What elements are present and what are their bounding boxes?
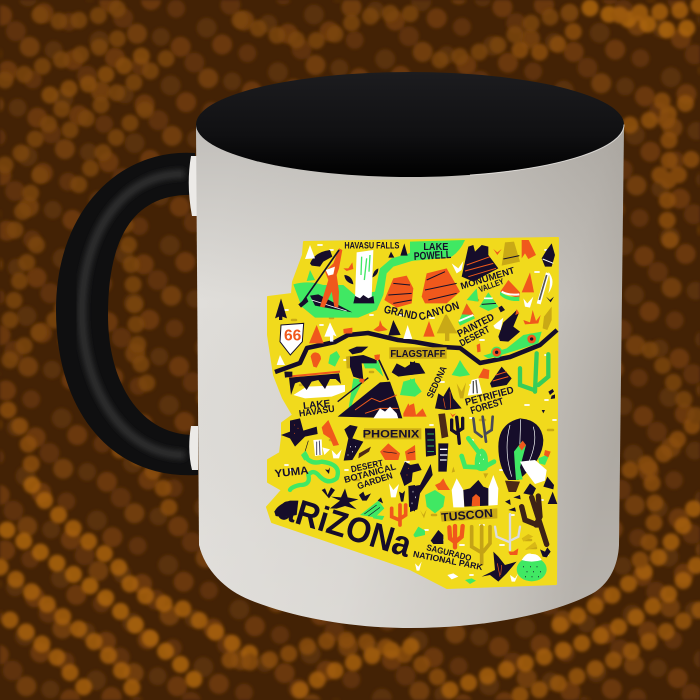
icon: leaves and plants	[343, 262, 388, 334]
icon: green rock	[413, 527, 425, 537]
icon: orange saguaro lower	[449, 526, 463, 547]
label: Grand Canyon	[383, 300, 461, 324]
icon: london bridge	[284, 372, 345, 398]
icon: orange rock left	[410, 403, 427, 417]
label: Petrified Forest: PETRIFIED	[464, 385, 515, 409]
icon: trees and plants	[423, 307, 552, 352]
icon: grey rock	[313, 439, 330, 456]
icon: green plant	[452, 360, 470, 377]
label: Sedona: SEDONA	[425, 364, 449, 400]
icon: black and grey cacti	[450, 413, 493, 443]
label: Flagstaff: FLAGSTAFF	[390, 349, 445, 360]
label: Painted Desert	[456, 312, 497, 349]
icon: paddle boarder	[298, 248, 352, 312]
icon: route 66 sign: 66	[284, 327, 301, 344]
icon: green rock	[400, 378, 415, 397]
icon: striped rock and petrified logs	[468, 367, 512, 396]
label: Desert Botanical Garden: GARDEN	[356, 470, 394, 491]
icon: green barrel cactus bottom	[517, 553, 547, 581]
icon: brown saguaro	[522, 496, 547, 544]
icon: route 66 sign	[280, 323, 304, 355]
icon: small plants	[415, 534, 551, 584]
icon: rocks right side	[505, 477, 557, 512]
icon: green cactus	[462, 438, 494, 471]
icon: small rocks	[431, 530, 443, 544]
map quadrant: southwest	[281, 418, 416, 525]
label: Tuscon: TUSCON	[441, 507, 493, 524]
icon: saguaro cactus green	[520, 353, 548, 392]
icon: sedona black rocks	[435, 387, 462, 410]
icon: big prickly pear	[400, 462, 415, 512]
lake and river: green water	[293, 252, 415, 318]
mug body	[196, 125, 624, 628]
mug rim and black interior	[196, 72, 624, 177]
icon: black agave plants	[322, 467, 405, 509]
icon: canyon rock left	[384, 276, 413, 308]
icon: olive plant	[457, 382, 466, 398]
label: Desert Botanical Garden	[343, 458, 398, 491]
icon: orange cactus	[322, 420, 339, 446]
icon: buildings	[425, 413, 448, 472]
label: Havasu Falls: HAVASU FALLS	[344, 241, 399, 251]
icon: hiker with poles	[338, 347, 388, 412]
label: Saguaro National Park: SAGURADO	[426, 542, 473, 563]
icon: white plants	[332, 449, 399, 497]
icon: prickly pear bottom	[482, 552, 517, 582]
icon: canyon rock right	[422, 268, 460, 303]
icon: pear body with spots	[410, 463, 433, 512]
arizona map artwork	[267, 238, 558, 588]
icon: small balloons	[311, 351, 340, 368]
label: Grand Canyon: GRAND	[383, 304, 419, 323]
icon: sedona dark rock	[392, 361, 415, 377]
label: Lake Powell	[414, 242, 452, 263]
map quadrant: southeast	[410, 413, 557, 584]
label: Painted Desert: DESERT	[458, 324, 492, 349]
icon: mission church	[452, 475, 498, 507]
label: Grand Canyon: CANYON	[417, 300, 461, 324]
icon: orange rock	[403, 403, 414, 417]
labels group, lower map	[274, 428, 497, 572]
icon: spotted prickly pear	[344, 425, 371, 461]
icon: black dots	[542, 389, 555, 413]
label: Lake Havasu: HAVASU	[298, 404, 335, 419]
road: route 66	[275, 330, 557, 372]
map outline, yellow state shape	[267, 238, 558, 588]
label: Lake Powell: LAKE	[423, 242, 448, 253]
icon: green vintage car with driver	[483, 309, 542, 358]
icon: grey saguaro	[495, 514, 520, 550]
label: Painted Desert: PAINTED	[456, 312, 497, 340]
labels group, positioned on the map	[298, 241, 516, 419]
icon: green snake	[290, 441, 338, 490]
icon: orange rocks phoenix	[380, 443, 416, 461]
icon: waterfall	[353, 250, 374, 303]
icon: mesas top right	[452, 240, 555, 273]
icon: plants beside church	[420, 467, 488, 518]
icon: painted desert rocks	[458, 272, 554, 326]
label: Phoenix: PHOENIX	[363, 428, 420, 440]
icon: left dark rock	[410, 362, 425, 375]
label: Lake Powell: POWELL	[414, 249, 452, 263]
lake powell water	[410, 240, 465, 261]
label: Desert Botanical Garden: BOTANICAL	[343, 461, 398, 485]
icon: green barrel cactus	[360, 497, 384, 520]
label: Saguaro National Park: NATIONAL PARK	[412, 549, 484, 572]
map quadrant: northeast	[410, 240, 555, 417]
scattered white and olive specks	[285, 243, 556, 575]
mug handle	[56, 153, 198, 475]
icon: monument valley butte	[462, 245, 498, 282]
label: Monument Valley: MONUMENT	[459, 265, 516, 291]
icon: mountain peak	[338, 382, 402, 418]
map quadrant: northwest	[275, 243, 415, 418]
label: Yuma: YUMA	[274, 465, 309, 480]
icon: hot air balloon with cactus and sheep	[498, 418, 551, 492]
label: Arizona title: aRiZONa	[274, 488, 416, 565]
icon: olive saguaro	[472, 526, 490, 564]
icon: pine and white trees	[275, 243, 412, 365]
label: Monument Valley: VALLEY	[477, 276, 505, 294]
icon: green rock left	[410, 378, 422, 397]
label: Petrified Forest: FOREST	[469, 396, 505, 417]
label: Desert Botanical Garden: DESERT	[350, 458, 384, 474]
label: Lake Havasu: LAKE	[302, 398, 331, 412]
icon: prickly pear black left	[281, 418, 318, 447]
icon: orange saguaro	[392, 505, 406, 525]
